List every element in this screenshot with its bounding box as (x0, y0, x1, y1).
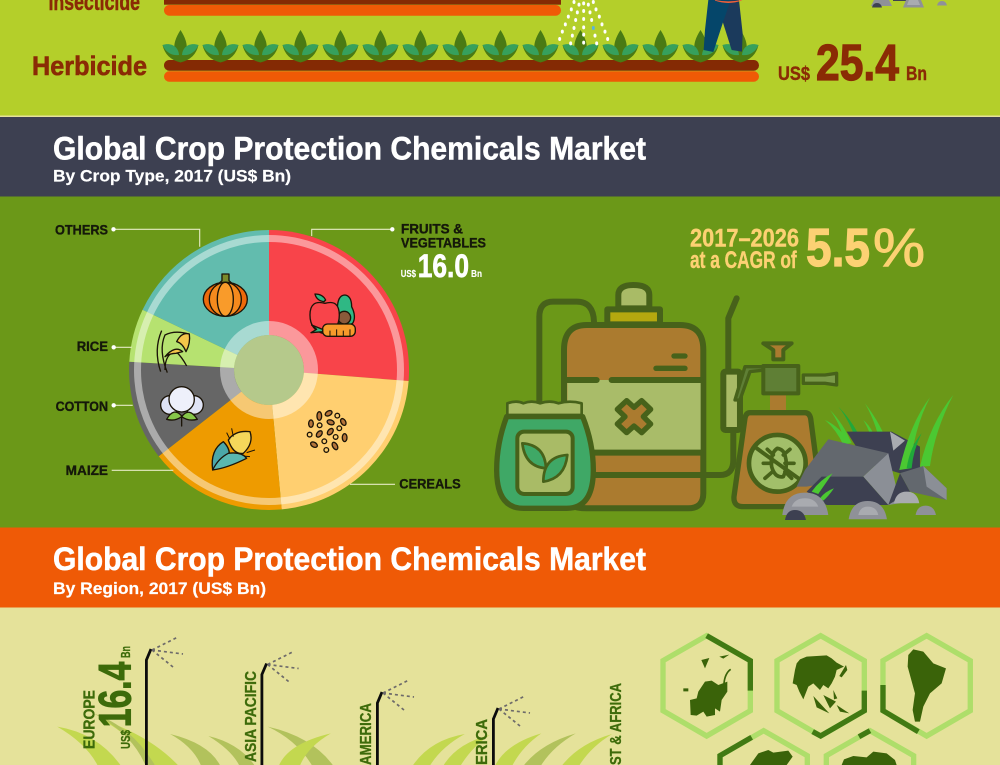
region labels: ERICA (474, 719, 491, 765)
region labels (82, 646, 625, 765)
sprinkler nozzles (146, 638, 530, 765)
region labels: EUROPE (82, 690, 99, 749)
pie labels: OTHERS (55, 222, 108, 237)
value: US$ 16.0 Bn: Bn (471, 269, 482, 280)
heading band: by crop type: By Crop Type, 2017 (US$ Bn) (53, 168, 291, 186)
value: US$ 25.4 Bn: US$ (778, 64, 810, 85)
heading band: by region (0, 528, 1000, 608)
region labels: US$ (118, 729, 133, 749)
icon: maize (212, 428, 255, 470)
pie labels: COTTON (56, 399, 108, 414)
grass and rocks (782, 395, 953, 520)
value: US$ 16.0 Bn: US$ (401, 268, 416, 280)
rocks at top right (871, 0, 947, 8)
knapsack sprayer tank (539, 285, 740, 508)
herbicide soil bars (164, 60, 759, 82)
icon: cereals (307, 409, 347, 452)
CAGR callout: at a CAGR of (690, 247, 797, 274)
panel: crop type (0, 196, 1000, 528)
region labels: AMERICA (358, 703, 375, 765)
pie labels: CEREALS (399, 476, 461, 491)
hexagon: Middle East and Africa (826, 731, 914, 765)
value: US$ 25.4 Bn: Bn (906, 64, 927, 85)
hexagon: North America (720, 731, 807, 765)
CAGR callout: 5.5 (806, 218, 870, 278)
icon: fruits and vegetables (310, 294, 355, 336)
illustration: sprayer, fertiliser bag, bottle and rocks (497, 285, 953, 520)
pie labels: VEGETABLES (401, 235, 486, 250)
pie leader lines (111, 227, 395, 484)
spray bottle (734, 343, 837, 507)
panel: herbicide and insecticide rows (0, 0, 1000, 117)
value: US$ 25.4 Bn: 25.4 (816, 34, 900, 91)
hexagon: Asia Pacific (777, 636, 864, 736)
region labels: ASIA PACIFIC (243, 671, 260, 762)
value: US$ 16.0 Bn: 16.0 (418, 248, 469, 284)
panel: by region (0, 608, 1000, 765)
icon: rice (157, 331, 190, 373)
CAGR callout: % (873, 218, 925, 278)
pie labels: FRUITS & (401, 221, 463, 236)
icon: pumpkin (203, 274, 247, 316)
pie labels: MAIZE (66, 463, 108, 478)
region hexagons and maps (663, 636, 970, 765)
CAGR callout (690, 218, 925, 278)
label: Herbicide: Herbicide (32, 51, 147, 81)
CAGR callout: 2017–2026 (690, 225, 799, 253)
heading band: by crop type (0, 117, 1000, 196)
farmer legs (704, 0, 743, 52)
grass blades (57, 713, 612, 765)
value: US$ 25.4 Bn (778, 34, 927, 91)
region labels: ST & AFRICA (608, 683, 625, 765)
icon: cotton (161, 387, 203, 426)
icons in pie (157, 274, 355, 470)
pie labels (55, 221, 486, 491)
water spray droplets (558, 0, 609, 45)
heading band: by crop type: Global Crop Protection Chemicals Market (53, 130, 646, 166)
hexagon: Latin America (883, 636, 970, 736)
insecticide soil bars (164, 0, 561, 16)
region labels: Bn (118, 646, 133, 658)
heading band: by region: By Region, 2017 (US$ Bn) (53, 580, 266, 598)
pie chart: crop type share (129, 230, 409, 510)
hexagon: Europe (663, 636, 750, 736)
pie labels: RICE (77, 339, 108, 354)
heading band: by region: Global Crop Protection Chemicals Market (53, 541, 646, 577)
row of plants (162, 30, 758, 62)
fertiliser bag (497, 402, 593, 508)
region labels: 16.4 (90, 662, 141, 727)
